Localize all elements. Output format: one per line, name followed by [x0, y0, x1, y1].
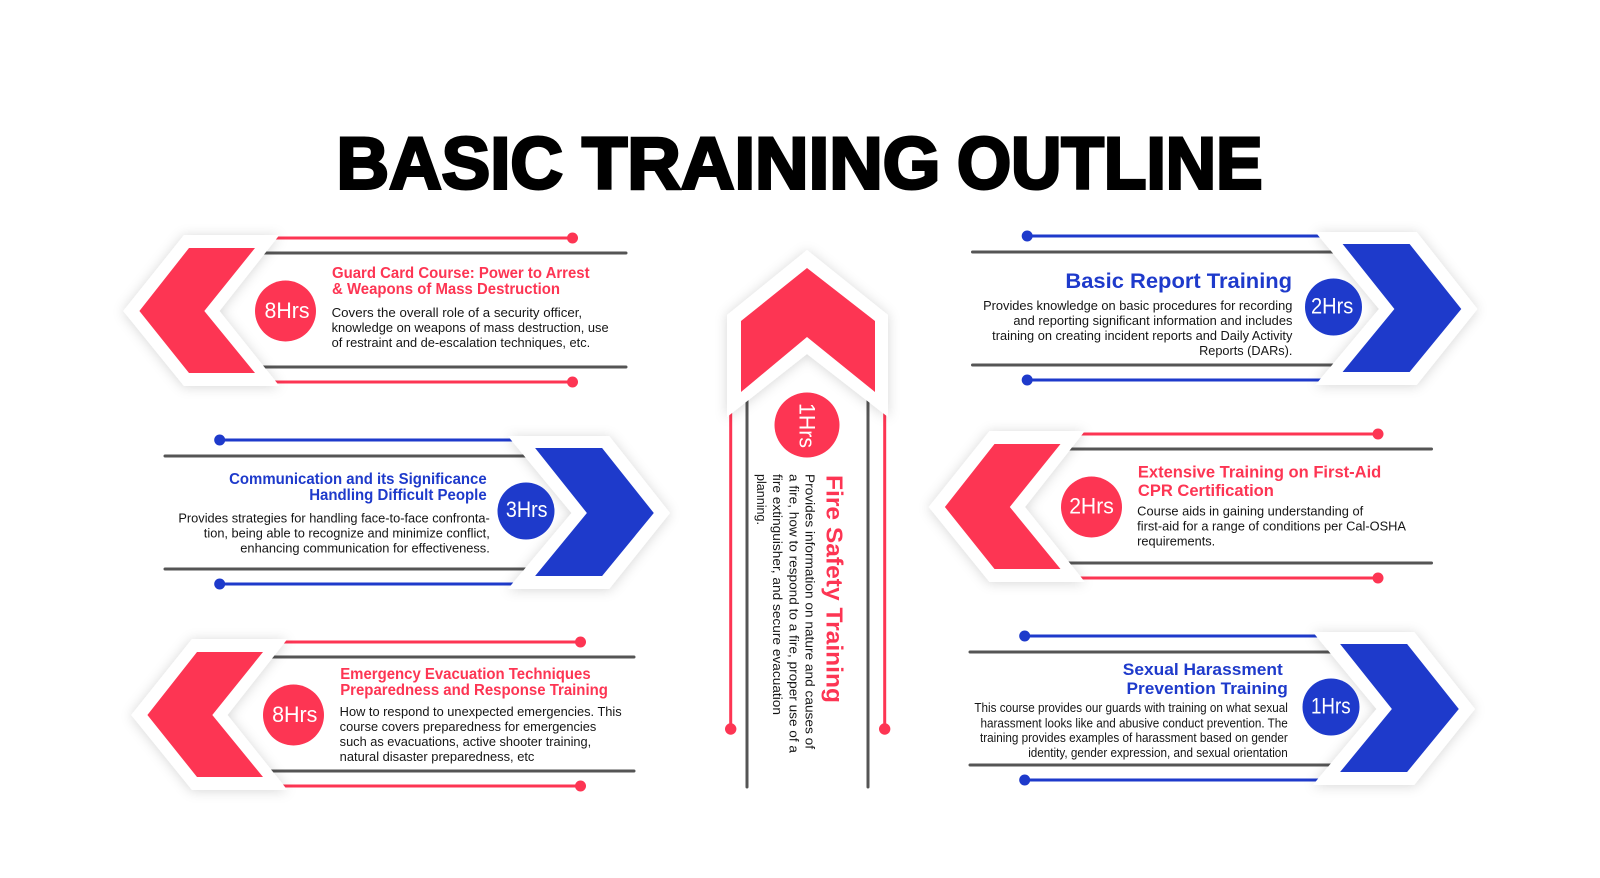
hours badge: 8Hrs: [272, 702, 317, 727]
panel: emergency evacuation: [131, 636, 634, 792]
description: [983, 299, 1293, 358]
hours badge: [1302, 678, 1360, 736]
connector lines: [258, 636, 634, 792]
hours badge: 2Hrs: [1311, 294, 1353, 318]
description: natural disaster preparedness, etc: [340, 750, 535, 764]
heading: [1123, 660, 1288, 698]
panel: fire safety training: [725, 250, 890, 787]
heading: [332, 265, 590, 298]
panel: sexual harassment prevention: [970, 630, 1475, 786]
description: [178, 512, 490, 556]
hours badge: 1Hrs: [1311, 694, 1351, 718]
title: TRAINING: [582, 124, 940, 204]
description: fire extinguisher, and secure evacuation: [770, 474, 784, 715]
panel: guard card course: [123, 232, 626, 388]
hours badge: [1061, 476, 1122, 538]
heading: [229, 471, 487, 504]
description: training provides examples of harassment based on gender: [980, 731, 1289, 745]
hours badge: 3Hrs: [506, 497, 548, 522]
connector lines: [725, 395, 890, 787]
description: How to respond to unexpected emergencies. This: [340, 705, 622, 719]
hours badge: [255, 280, 316, 342]
icon: blue right chevron: [1315, 232, 1478, 385]
heading: Prevention Training: [1126, 679, 1288, 698]
description: of restraint and de-escalation techniques, etc.: [332, 336, 590, 350]
icon: red left chevron: [131, 639, 287, 790]
title: [336, 124, 1262, 204]
hours badge: [498, 482, 554, 540]
description: Provides knowledge on basic procedures for recording: [983, 299, 1292, 313]
panel: first-aid and CPR: [929, 428, 1432, 584]
hours badge: 1Hrs: [794, 403, 819, 448]
heading: Preparedness and Response Training: [340, 682, 608, 699]
description: such as evacuations, active shooter training,: [340, 735, 591, 749]
description: [754, 474, 817, 754]
heading: Sexual Harassment: [1123, 660, 1283, 679]
icon: blue right chevron: [1313, 632, 1475, 785]
description: harassment looks like and abusive conduct prevention. The: [980, 716, 1288, 730]
description: [1137, 505, 1407, 549]
icon: red left chevron: [123, 235, 279, 386]
description: Course aids in gaining understanding of: [1137, 505, 1364, 519]
description: [340, 705, 622, 764]
heading: Handling Difficult People: [309, 487, 487, 504]
heading: Guard Card Course: Power to Arrest: [332, 265, 590, 282]
description: Provides strategies for handling face-to-face confronta-: [178, 512, 490, 526]
connector lines: [970, 630, 1344, 786]
heading: CPR Certification: [1138, 482, 1274, 500]
heading: Basic Report Training: [1065, 269, 1292, 293]
hours badge: 8Hrs: [264, 298, 310, 323]
description: [974, 701, 1289, 760]
heading: Communication and its Significance: [229, 471, 487, 488]
heading: & Weapons of Mass Destruction: [332, 281, 560, 298]
description: course covers preparedness for emergencies: [340, 720, 596, 734]
description: tion, being able to recognize and minimize conflict,: [204, 527, 490, 541]
description: knowledge on weapons of mass destruction, use: [332, 321, 609, 335]
heading: Extensive Training on First-Aid: [1138, 464, 1381, 482]
description: a fire, how to respond to a fire, proper use of a: [786, 474, 800, 754]
connector lines: [972, 230, 1346, 386]
heading: [340, 666, 608, 699]
icon: blue right chevron: [508, 436, 670, 589]
description: and reporting significant information and includes: [1013, 314, 1292, 328]
description: Provides information on nature and causes of: [803, 474, 817, 750]
description: first-aid for a range of conditions per Cal-OSHA: [1137, 520, 1407, 534]
heading: Fire Safety Training: [822, 475, 848, 703]
description: requirements.: [1137, 535, 1215, 549]
hours badge: 2Hrs: [1069, 494, 1114, 518]
connector lines: [250, 232, 626, 388]
hours badge: [263, 684, 324, 746]
title: BASIC: [336, 124, 563, 204]
icon: red left chevron: [929, 431, 1085, 582]
description: planning.: [754, 474, 768, 525]
description: enhancing communication for effectiveness.: [240, 542, 490, 556]
description: This course provides our guards with training on what sexual: [974, 701, 1288, 715]
heading: Emergency Evacuation Techniques: [340, 666, 591, 683]
title: OUTLINE: [957, 124, 1262, 204]
icon: red up chevron: [727, 250, 888, 417]
connector lines: [165, 434, 538, 590]
panel: communication: [165, 434, 670, 590]
heading: [1138, 464, 1381, 500]
description: Reports (DARs).: [1199, 344, 1292, 358]
hours badge: [1305, 278, 1362, 336]
description: Covers the overall role of a security officer,: [332, 306, 582, 320]
description: [332, 306, 609, 350]
hours badge: [774, 392, 840, 458]
connector lines: [1056, 428, 1432, 584]
description: training on creating incident reports and Daily Activity: [992, 329, 1293, 343]
panel: basic report training: [972, 230, 1478, 386]
description: identity, gender expression, and sexual orientation: [1028, 746, 1288, 760]
